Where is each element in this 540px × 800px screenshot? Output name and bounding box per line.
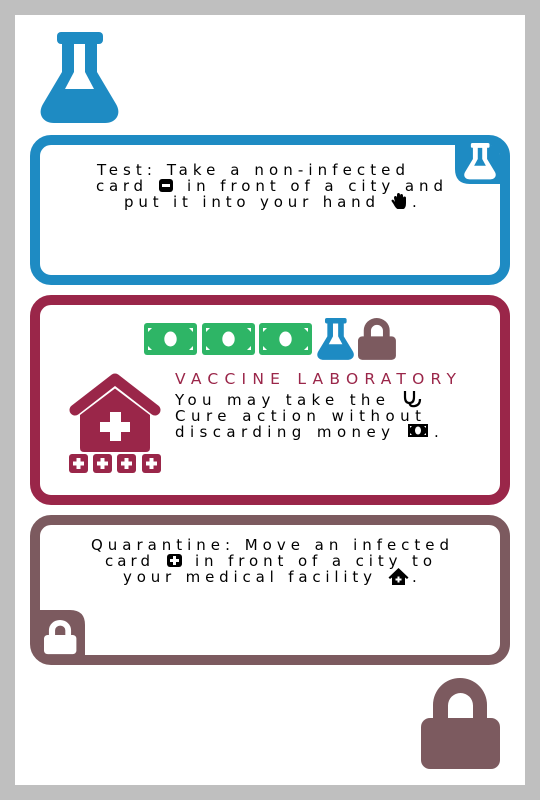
- text: vaccine rule: You may take the: [174, 391, 385, 409]
- icon: flask cost: [317, 318, 354, 360]
- heading: vaccine laboratory: VACCINE LABORATORY: [175, 370, 457, 388]
- icon: medical facility house: [69, 379, 161, 473]
- text: vaccine rule: .: [434, 423, 439, 441]
- text: quarantine rule: your medical facility: [123, 568, 372, 586]
- icon: money cost 3: [259, 323, 312, 355]
- icon: money cost 2: [202, 323, 255, 355]
- text: test rule: in front of a city and: [187, 177, 443, 195]
- icon: large lock: [421, 678, 500, 769]
- icon: hand: [392, 193, 406, 209]
- panel: test: [35, 140, 505, 280]
- icon: minus card: [159, 179, 173, 192]
- panel: quarantine: [35, 520, 505, 660]
- text: quarantine rule: in front of a city to: [195, 552, 432, 570]
- text: test rule: [96, 161, 443, 211]
- text: test rule: card: [96, 177, 143, 195]
- text: vaccine rule: [174, 391, 439, 441]
- text: vaccine rule: Cure action without: [175, 407, 421, 425]
- icon: stethoscope: [405, 391, 420, 406]
- icon: plus card: [167, 554, 182, 567]
- text: quarantine rule: Quarantine: Move an infected: [91, 536, 449, 554]
- icon: money cost 1: [144, 323, 197, 355]
- icon: large flask: [41, 32, 118, 123]
- icon: home: [388, 568, 408, 585]
- text: quarantine rule: .: [412, 568, 417, 586]
- icon: lock cost: [358, 318, 396, 360]
- text: test rule: .: [412, 193, 417, 211]
- text: vaccine rule: discarding money: [175, 423, 390, 441]
- icon: four infected cards: [69, 454, 161, 473]
- tab: lock corner: [40, 610, 85, 655]
- icon: money: [408, 424, 428, 437]
- tab: flask corner: [455, 143, 500, 184]
- panel: vaccine laboratory: [35, 300, 505, 500]
- text: quarantine rule: card: [105, 552, 150, 570]
- text: test rule: Test: Take a non-infected: [96, 161, 405, 179]
- text: quarantine rule: [91, 536, 449, 586]
- text: test rule: put it into your hand: [124, 193, 375, 211]
